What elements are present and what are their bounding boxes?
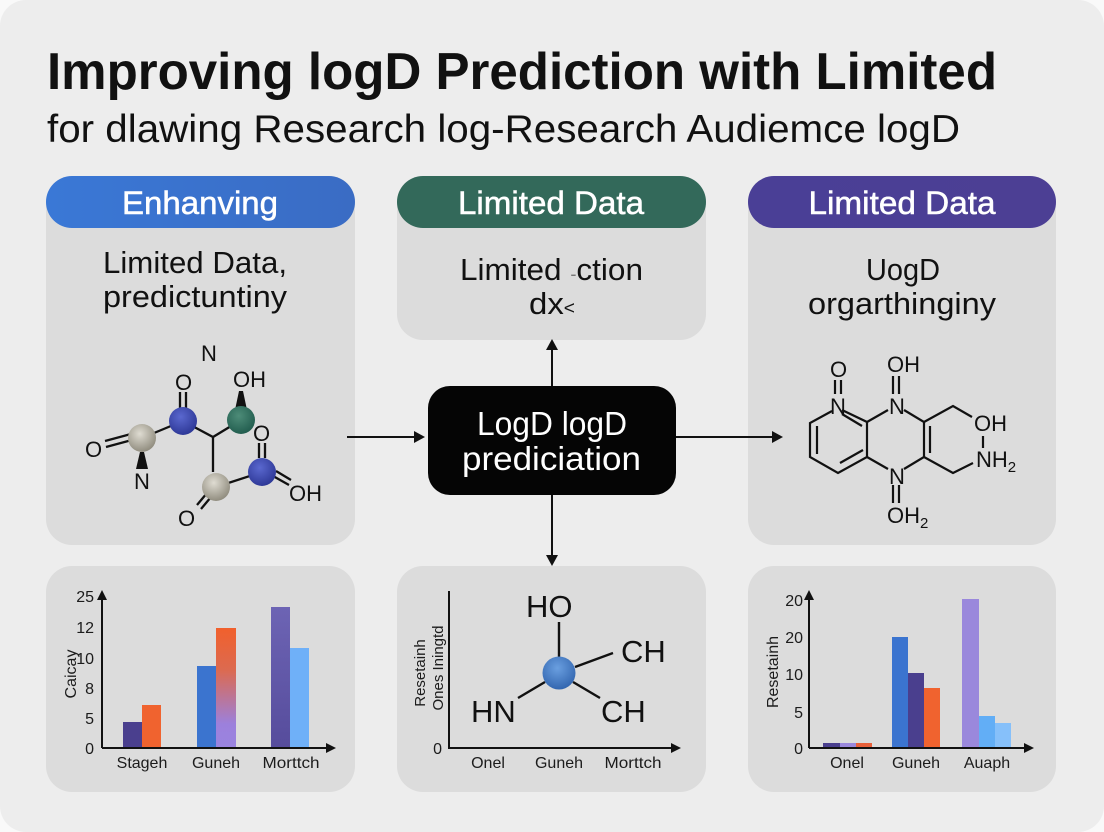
- panel text: right: UogD: [866, 252, 940, 287]
- molecule: ball and stick: N: [134, 469, 150, 494]
- panel: molecule chart middle: [397, 566, 706, 792]
- axis labels: Guneh: [535, 755, 583, 772]
- axis labels: Auaph: [964, 755, 1010, 772]
- panel: bar chart right: [748, 566, 1056, 792]
- molecule: ball and stick: O: [253, 421, 270, 446]
- axis labels: 10: [76, 651, 94, 668]
- title: Improving logD Prediction with Limited: [47, 43, 997, 101]
- axis labels: 0: [85, 741, 94, 758]
- panel header: Enhanving: Enhanving: [122, 185, 278, 221]
- panel header: Enhanving: [46, 176, 355, 228]
- axis labels: Resetainh: [412, 639, 429, 707]
- molecule: fused rings: NH: [976, 447, 1008, 472]
- axis labels: Onel: [471, 755, 505, 772]
- arrow: center up: [546, 339, 558, 386]
- subtitle: for dlawing Research log-Research Audiemce logD: [47, 108, 960, 151]
- molecule: fused rings: N: [830, 394, 846, 419]
- molecule: fused rings: O: [830, 357, 847, 382]
- axis labels: 12: [76, 620, 94, 637]
- panel text: left: [103, 245, 288, 314]
- molecule: fused rings: 2: [1008, 459, 1016, 476]
- panel text: middle: Limited -ction: [460, 252, 643, 287]
- axis labels: Guneh: [892, 755, 940, 772]
- axis labels: 8: [85, 681, 94, 698]
- axis labels: 10: [785, 667, 803, 684]
- center box: logD prediction: prediciation: [462, 440, 641, 477]
- molecule: fused rings: OH: [887, 352, 920, 377]
- molecule: ball and stick: OH: [233, 367, 266, 392]
- axis labels: 25: [76, 589, 94, 606]
- molecule: central atom: HN: [471, 694, 516, 729]
- panel header: Limited Data purple: Limited Data: [808, 185, 996, 221]
- axis labels: [412, 625, 662, 772]
- molecule: fused rings: 2: [920, 515, 928, 532]
- arrow: center down: [546, 495, 558, 566]
- panel text: middle: [460, 252, 643, 321]
- panel: bar chart left: [46, 566, 355, 792]
- panel header: Limited Data purple: [748, 176, 1056, 228]
- molecule: ball and stick: O: [85, 437, 102, 462]
- molecule: fused rings: [810, 352, 1016, 532]
- axis labels: Morttch: [604, 755, 662, 772]
- molecule: ball and stick: O: [178, 506, 195, 531]
- molecule: ball and stick: N: [201, 341, 217, 366]
- center box: logD prediction: LogD logD: [477, 405, 627, 442]
- axis labels: Stageh: [117, 755, 167, 772]
- axis labels: Resetainh: [765, 636, 782, 708]
- molecule: central atom: CH: [601, 694, 646, 729]
- axis labels: Onel: [830, 755, 864, 772]
- molecule: ball and stick: OH: [289, 481, 322, 506]
- panel text: left: predictuntiny: [103, 279, 288, 314]
- molecule: fused rings: OH: [974, 411, 1007, 436]
- axes: [804, 590, 1034, 753]
- axis labels: [63, 589, 320, 772]
- axes: [449, 591, 681, 753]
- arrow: center to right: [676, 431, 783, 443]
- axis labels: 5: [85, 711, 94, 728]
- axis labels: Caicay: [63, 650, 80, 698]
- axis labels: Morttch: [262, 755, 320, 772]
- panel text: middle: dx<: [529, 286, 575, 321]
- molecule: ball and stick: O: [175, 370, 192, 395]
- panel text: right: [808, 252, 997, 321]
- axis labels: 20: [785, 630, 803, 647]
- axis labels: 20: [785, 593, 803, 610]
- molecule: fused rings: N: [889, 464, 905, 489]
- panel: right top: [748, 176, 1056, 545]
- molecule: central atom: [471, 589, 666, 729]
- axis labels: [765, 593, 1010, 772]
- axis labels: Ones Iningtd: [430, 625, 447, 711]
- panel header: Limited Data green: [397, 176, 706, 228]
- panel: left top: [46, 176, 355, 545]
- axis labels: Guneh: [192, 755, 240, 772]
- molecule: fused rings: N: [889, 394, 905, 419]
- arrow: left to center: [347, 431, 425, 443]
- panel header: Limited Data green: Limited Data: [458, 185, 644, 221]
- panel text: left: Limited Data,: [103, 245, 287, 280]
- axis labels: 0: [433, 741, 442, 758]
- axis labels: 5: [794, 705, 803, 722]
- center box: logD prediction: [428, 386, 676, 495]
- bars: [823, 599, 1011, 748]
- bars: [123, 607, 309, 748]
- panel text: right: orgarthinginy: [808, 286, 997, 321]
- panel: middle top: [397, 176, 706, 340]
- axis labels: 0: [794, 741, 803, 758]
- molecule: central atom: CH: [621, 634, 666, 669]
- molecule: central atom: HO: [526, 589, 572, 624]
- axes: [97, 590, 336, 753]
- molecule: ball and stick: [85, 341, 322, 531]
- molecule: fused rings: OH: [887, 503, 920, 528]
